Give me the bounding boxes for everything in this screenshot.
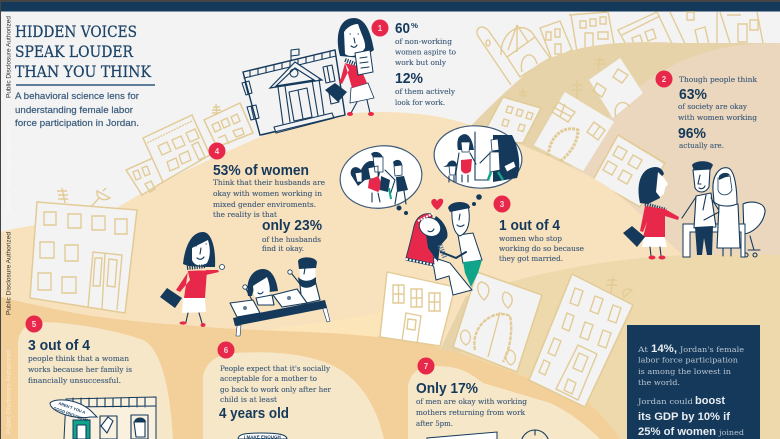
side notes: public disclosure [6, 16, 12, 434]
subtitle: A behavioral science lens for [15, 91, 139, 102]
stat 3: working do so because [499, 244, 584, 253]
stat 1: of non-working [395, 37, 452, 46]
stat 7 [416, 358, 527, 428]
subtitle [15, 91, 139, 129]
speech bubble: panel 5: GOOD PROVIDER? [53, 406, 89, 423]
navy stat box: 25% of women [638, 426, 716, 438]
top header bar [0, 0, 780, 12]
illustration: paper and clock, panel 7 [427, 430, 549, 439]
stat 5: works because her family is [28, 365, 132, 374]
stat 5: 3 out of 4 [28, 337, 91, 354]
stat 1: look for work. [395, 98, 445, 107]
stat 4: 4 [215, 147, 220, 156]
stat 4: only 23% [262, 217, 322, 234]
stat 7: mothers returning from work [416, 408, 526, 417]
stat 2 [656, 70, 758, 150]
stat 1: women aspire to [395, 48, 457, 56]
navy stat box: At [637, 345, 648, 354]
subtitle: force participation in Jordan. [15, 118, 139, 129]
thought dots [396, 194, 482, 215]
stat 2: Though people think [679, 75, 758, 84]
stat 5 [26, 316, 132, 385]
hill: main peach [0, 112, 690, 439]
stat 2: 2 [662, 75, 667, 84]
stat 5: people think that a woman [28, 354, 129, 363]
speech bubble: panel 5 [50, 400, 97, 423]
panel: 7 background [408, 366, 600, 439]
stat 7: 7 [424, 362, 429, 371]
illustration: thought bubble door [431, 122, 525, 192]
stat 1: of them actively [395, 87, 456, 96]
stat 4: 53% of women [213, 162, 309, 179]
stat 4 [208, 142, 325, 253]
illustration: thought bubble family [336, 141, 426, 213]
subtitle: understanding female labor [15, 105, 133, 116]
stat 2: 63% [679, 86, 707, 103]
stat 5: 5 [32, 320, 37, 329]
navy stat box: is among the lowest in [638, 367, 731, 376]
stat 4: mixed gender enviroments. [213, 200, 316, 209]
navy stat box: its GDP by 10% if [638, 411, 730, 423]
skyline: top right buildings [477, 12, 763, 85]
navy stat box: Jordan's female [679, 345, 744, 354]
title: THAN YOU THINK [15, 62, 152, 81]
stat 1: 12% [395, 70, 423, 87]
stat 1 [372, 20, 457, 107]
stat 3: women who stop [499, 234, 562, 243]
stat 2: 96% [678, 125, 706, 142]
navy stat box: joined [718, 428, 744, 437]
stat 4: of the husbands [262, 235, 321, 244]
navy stat box: labor force participation [638, 356, 738, 364]
stat 1: % [411, 23, 419, 30]
hill: pink sand [570, 43, 780, 300]
stat 6: go back to work only after her [220, 385, 331, 394]
stat 2: actually are. [679, 141, 724, 150]
stat 3: 3 [500, 200, 505, 209]
illustration: bride and groom [406, 202, 482, 295]
navy stat box: 14%, [651, 343, 677, 355]
stat 6 [218, 342, 331, 422]
stat 7: after 5pm. [416, 419, 453, 428]
stat 5: financially unsuccessful. [28, 376, 121, 385]
stat 4: okay with women working in [213, 189, 322, 198]
illustration: coworkers at desk [230, 257, 330, 336]
stat 6: People expect that it's socially [220, 364, 331, 373]
illustration: building with figures, panel 5 [64, 397, 156, 439]
stat 3 [494, 196, 584, 263]
title [15, 22, 152, 81]
stat 6: acceptable for a mother to [220, 374, 318, 383]
stat 7: Only 17% [416, 380, 478, 397]
buildings: small on left slope [126, 103, 253, 195]
stat 4: Think that their husbands are [213, 178, 325, 187]
stat 2: of society are okay [678, 102, 748, 111]
stat 2: with women working [678, 113, 757, 122]
illustration: man and woman in hijab [682, 161, 740, 256]
stat 1: 60 [395, 20, 410, 37]
speech bubble: panel 5: AREN'T YOU A [58, 401, 86, 415]
buildings on the tan hill [480, 57, 665, 207]
stat 4: find it okay. [262, 244, 304, 253]
speech bubble: panel 6 [238, 433, 287, 439]
stat 3: they got married. [499, 254, 563, 263]
side notes: public disclosure: Public Disclosure Authorized [6, 125, 12, 210]
title: HIDDEN VOICES [15, 22, 137, 41]
stat 6: 6 [224, 346, 229, 355]
left page edge [0, 0, 1, 439]
road band [0, 297, 620, 439]
illustration: woman holding CV [325, 18, 374, 116]
stat 7: of men are okay with working [416, 397, 527, 406]
navy stat box: boost [695, 395, 725, 407]
illustration: school building [242, 49, 345, 135]
stat 3: 1 out of 4 [499, 217, 561, 234]
illustration: woman shaking hands [623, 167, 679, 260]
navy stat box: Jordan could [637, 397, 693, 406]
stat 1: work but only [395, 58, 447, 67]
hill: tan [440, 42, 780, 300]
side notes: public disclosure: Public Disclosure Authorized [6, 232, 12, 315]
stat 4: the reality is that [213, 210, 277, 219]
stat 6: child is at least [220, 395, 277, 404]
building: large left [30, 188, 137, 313]
title: SPEAK LOUDER [15, 42, 134, 61]
ground: tan right [440, 254, 780, 439]
buildings: centre row [380, 272, 633, 407]
side notes: public disclosure: Public Disclosure Authorized [6, 350, 12, 434]
side notes: public disclosure: Public Disclosure Authorized [6, 16, 12, 98]
illustration: woman with briefcase, left [160, 232, 224, 327]
illustration: chair and desk [683, 202, 765, 257]
navy stat box: the world. [638, 378, 680, 387]
navy stat box [627, 325, 760, 439]
title rule [16, 84, 155, 86]
stat 1: 1 [378, 24, 383, 33]
panel: 6 background [203, 352, 384, 439]
stat 6: 4 years old [219, 405, 289, 422]
icon: heart [431, 199, 443, 210]
panel: 5 background [18, 322, 173, 439]
